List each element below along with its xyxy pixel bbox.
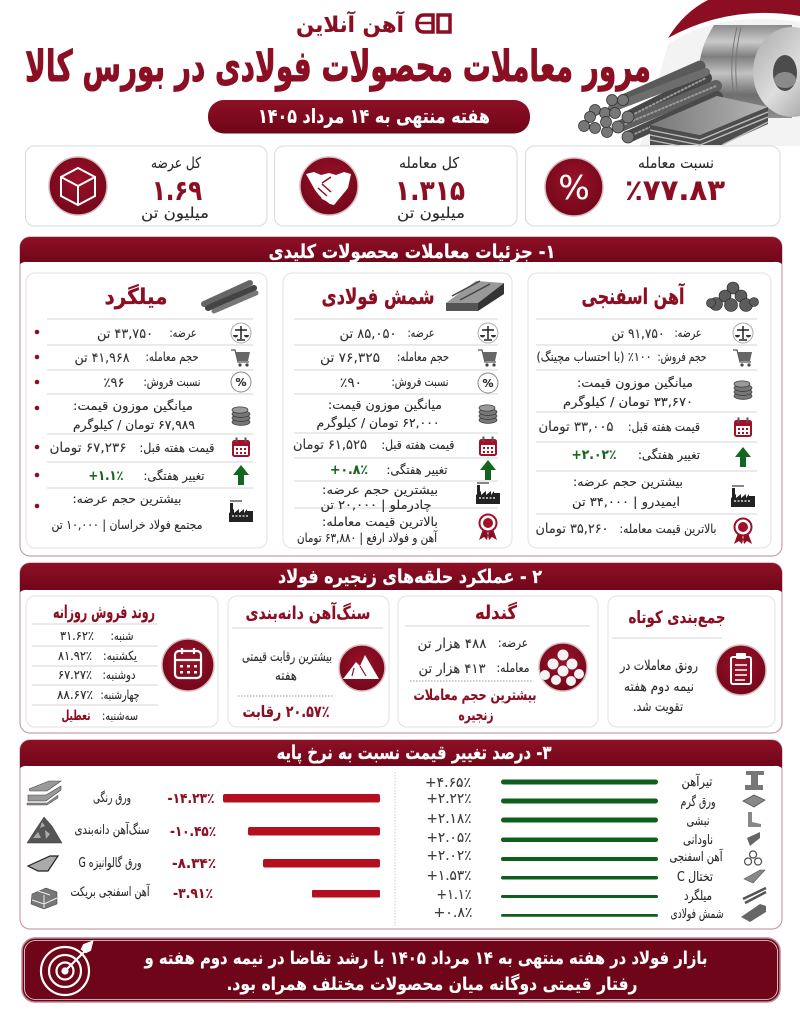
row: Saturday: شنبه: [110, 628, 134, 643]
row: average price: ۳۳,۶۷۰ تومان / کیلوگرم [563, 394, 693, 410]
row: top supply: بیشترین حجم عرضه: [322, 482, 438, 498]
bar: slab C [426, 868, 765, 885]
row icons [731, 323, 755, 544]
row: weekly change: +۲.۰۲٪ [572, 447, 616, 463]
row: top price: آهن و فولاد ارفع | ۶۳,۸۸۰ تومان [297, 530, 437, 546]
panel: daily sales trend [26, 596, 218, 727]
bar: galvanized G: ورق گالوانیزه G [78, 855, 142, 871]
row: sale ratio: ٪۹۰ [340, 375, 362, 391]
panel: steel billet [283, 273, 512, 548]
row: volume [74, 349, 198, 366]
row: supply [612, 325, 702, 342]
row: weekly change: تغییر هفتگی: [638, 447, 700, 463]
row: supply: عرضه: [170, 325, 196, 341]
row: Wednesday: ۸۸.۶۷٪ [57, 687, 93, 702]
chart: negative changes [27, 781, 380, 909]
panel: granulated iron ore: هفته [275, 668, 297, 684]
panel: short summary [608, 596, 775, 727]
row: previous price [538, 419, 700, 435]
bar: slab C: تختال C [677, 870, 713, 885]
icon: cube [61, 168, 95, 205]
bar: rebar: +۱.۱٪ [436, 887, 472, 903]
row: top supply: بیشترین حجم عرضه: [573, 474, 683, 490]
row: sale ratio [104, 374, 200, 391]
row: previous price: قیمت هفته قبل: [628, 419, 700, 434]
row: Monday: ۶۷.۲۷٪ [58, 667, 92, 682]
row: sale ratio [340, 374, 448, 391]
panel: rebar [26, 273, 267, 548]
row: supply: عرضه: [674, 325, 702, 341]
bar: channel [426, 830, 760, 848]
row: supply: ۴۳,۷۵۰ تن [97, 326, 153, 342]
bullet dots [35, 330, 39, 508]
icon: mountain [339, 645, 385, 691]
row: average price [563, 375, 693, 410]
bar: channel: ناودانی [683, 833, 713, 848]
section 2 heading: ۲ - عملکرد حلقه‌های زنجیره فولاد [278, 566, 542, 588]
row: Sunday [58, 648, 137, 663]
bar: sponge iron: آهن اسفنجی [670, 848, 724, 865]
bar: slab C: +۱.۵۳٪ [426, 868, 472, 884]
bar: sponge iron [426, 848, 762, 865]
panel: short summary: نیمه دوم هفته [624, 679, 694, 695]
row: Sunday: ۸۱.۹۲٪ [58, 648, 92, 663]
bar: beam: +۴.۶۵٪ [425, 775, 471, 791]
bar: briquette: -۳.۹۱٪ [173, 886, 213, 902]
row: supply: عرضه: [408, 325, 434, 341]
row: top price [536, 521, 716, 537]
KPI card: total trade: میلیون تن [397, 204, 465, 222]
panel: short summary: رونق معاملات در [619, 658, 698, 674]
row: supply: ۹۱,۷۵۰ تن [612, 326, 664, 342]
row icons [476, 323, 500, 540]
image: rebar bundle [204, 283, 256, 311]
row: weekly change [88, 468, 205, 484]
row: weekly change [572, 447, 700, 463]
row: Wednesday [57, 687, 140, 703]
panel: pellet [398, 596, 598, 727]
row: top price: بالاترین قیمت معامله: [620, 521, 716, 537]
row: trade [418, 660, 530, 677]
row: Saturday [60, 628, 134, 643]
bar: galvanized G: -۸.۳۴٪ [172, 856, 216, 872]
row: volume: حجم معامله: [397, 349, 449, 365]
bar: hot sheet: +۲.۲۲٪ [426, 791, 472, 807]
icon: clipboard [716, 645, 766, 695]
bar: angle: نبشی [686, 814, 710, 829]
bar: colored sheet: ورق رنگی [93, 790, 131, 806]
row: top price [297, 514, 438, 546]
chart: positive changes [425, 771, 766, 922]
bar: briquette: آهن اسفنجی بریکت [70, 883, 151, 900]
date pill: هفته منتهی به ۱۴ مرداد ۱۴۰۵ [258, 104, 490, 128]
row: volume: ۴۱,۹۶۸ تن [74, 350, 130, 366]
conclusion banner [22, 938, 780, 1002]
row: top supply [320, 482, 438, 513]
product name: آهن اسفنجی [582, 282, 685, 310]
row: average price: میانگین موزون قیمت: [328, 397, 442, 413]
section 2: steel chain performance [20, 563, 782, 733]
icon: calendar [162, 639, 214, 691]
row: top supply [572, 474, 683, 510]
bar: billet [434, 904, 766, 922]
section 1: key product details [20, 237, 782, 556]
row: supply: ۴۸۸ هزار تن [418, 636, 486, 652]
row: sale volume: ٪۱۰۰ (با احتساب مچینگ) [536, 349, 652, 364]
row: sale ratio: نسبت فروش: [392, 374, 448, 390]
section 3 heading: ۳- درصد تغییر قیمت نسبت به نرخ پایه [276, 742, 552, 764]
bar: rebar [436, 887, 766, 904]
row: supply [97, 325, 196, 342]
row: top supply: چادرملو | ۲۰,۰۰۰ تن [320, 497, 432, 513]
hero image: steel coil, rebar and sheets [578, 0, 800, 146]
panel: short summary: جمع‌بندی کوتاه [628, 608, 726, 628]
bar: briquette [31, 883, 380, 909]
row: volume: ۷۶,۳۲۵ تن [320, 350, 380, 366]
product name: میلگرد [104, 283, 168, 310]
row: previous price: قیمت هفته قبل: [382, 437, 455, 452]
row: weekly change: +۰.۸٪ [330, 462, 368, 478]
row: top supply [52, 491, 202, 533]
row: previous price: قیمت هفته قبل: [140, 440, 215, 455]
row: Tuesday: سه‌شنبه: [102, 708, 138, 723]
row: average price [316, 397, 442, 431]
panel: pellet: گندله [475, 601, 518, 624]
bar: galvanized G [28, 855, 380, 872]
bar: sponge iron: +۲.۰۲٪ [426, 848, 472, 864]
row: sale ratio: ٪۹۶ [104, 375, 124, 391]
row: top supply: بیشترین حجم عرضه: [72, 491, 182, 507]
row: previous price: ۶۱,۵۲۵ تومان [293, 437, 367, 453]
row: sale volume: حجم فروش: [658, 349, 706, 365]
row: Wednesday: چهارشنبه: [100, 687, 140, 703]
KPI card: total trade: کل معامله [399, 154, 460, 172]
image: sponge iron pellets [706, 282, 758, 312]
product name: شمش فولادی [322, 285, 434, 310]
bar: granulated ore: سنگ‌آهن دانه‌بندی [74, 821, 150, 838]
row: trade: معامله: [496, 660, 530, 675]
row: top price: بالاترین قیمت معامله: [322, 514, 438, 530]
bar: beam: تیرآهن [682, 773, 713, 790]
row icons: % [235, 376, 247, 389]
row icons [229, 323, 253, 522]
row: supply [340, 325, 434, 342]
KPI card: trade ratio: نسبت معامله [638, 154, 714, 172]
conclusion banner: بازار فولاد در هفته منتهی به ۱۴ مرداد ۱۴۰۵ با رشد تقاضا در نیمه دوم هفته و [144, 948, 707, 969]
row: supply [418, 635, 528, 652]
bar: hot sheet [426, 791, 765, 810]
logo [296, 10, 450, 38]
KPI card: trade ratio: % [558, 168, 590, 207]
row icons: % [482, 377, 494, 390]
row: top price: ۳۵,۲۶۰ تومان [536, 521, 608, 537]
panel: granulated iron ore: بیشترین رقابت قیمتی [242, 649, 332, 665]
row: average price [73, 398, 195, 433]
row: average price: ۶۲,۰۰۰ تومان / کیلوگرم [316, 415, 440, 431]
row: previous price: ۳۳,۰۰۵ تومان [538, 419, 614, 435]
logo: آهن آنلاین [296, 10, 404, 38]
row: previous price [293, 437, 455, 453]
bar: billet: شمش فولادی [670, 907, 724, 922]
callout: بیشترین حجم معاملات [414, 686, 536, 704]
image: billets [446, 281, 504, 311]
row: Monday: دوشنبه: [102, 667, 136, 683]
bar: colored sheet: -۱۴.۲۳٪ [168, 791, 214, 807]
panel: daily sales trend: روند فروش روزانه [53, 602, 155, 623]
row: sale volume [536, 349, 706, 365]
callout [414, 686, 536, 724]
panel: short summary: تقویت شد. [633, 699, 683, 715]
KPI card: total supply: ۱.۶۹ [152, 174, 202, 207]
bar: hot sheet: ورق گرم [680, 794, 716, 810]
row: weekly change [330, 462, 448, 478]
panel: granulated iron ore: ۲۰.۵۷٪ رقابت [242, 702, 330, 721]
date pill [208, 100, 530, 134]
bar: angle [426, 811, 761, 829]
KPI card: total supply: میلیون تن [141, 204, 209, 222]
icon: target [41, 942, 92, 995]
icon: handshake [306, 172, 351, 205]
panel: sponge iron [528, 273, 771, 548]
row: Tuesday: تعطیل [62, 708, 90, 724]
panel: granulated iron ore [228, 596, 389, 727]
KPI card: trade ratio: ٪۷۷.۸۳ [625, 173, 725, 207]
KPI card: trade ratio [526, 146, 780, 226]
KPI card: total trade: ۱.۳۱۵ [395, 174, 465, 207]
bar: angle: +۲.۱۸٪ [426, 811, 472, 827]
bar: colored sheet [27, 781, 380, 807]
bar: channel: +۲.۰۵٪ [426, 830, 472, 846]
row: volume: حجم معامله: [146, 349, 198, 365]
callout: زنجیره [458, 706, 494, 724]
bar: rebar: میلگرد [684, 888, 712, 904]
section 1 heading: ۱- جزئیات معاملات محصولات کلیدی [268, 241, 556, 263]
row: volume [320, 349, 449, 366]
row: weekly change: تغییر هفتگی: [386, 462, 448, 478]
row: Tuesday [62, 708, 138, 724]
row: average price: میانگین موزون قیمت: [73, 398, 193, 414]
bar: granulated ore [27, 817, 380, 843]
row: trade: ۴۱۳ هزار تن [418, 661, 486, 677]
row: supply: عرضه: [498, 635, 528, 651]
row: weekly change: تغییر هفتگی: [144, 468, 205, 484]
icon: pellets [539, 643, 587, 691]
KPI card: total supply: کل عرضه [151, 154, 202, 172]
conclusion banner: رفتار قیمتی دوگانه میان محصولات مختلف همراه بود. [226, 973, 638, 995]
bar: beam [425, 771, 764, 791]
row: sale ratio: نسبت فروش: [144, 374, 200, 390]
row: supply: ۸۵,۰۵۰ تن [340, 326, 396, 342]
row: average price: ۶۷,۹۸۹ تومان / کیلوگرم [73, 417, 195, 433]
row: weekly change: +۱.۱٪ [88, 468, 124, 484]
bar: granulated ore: -۱۰.۴۵٪ [170, 824, 216, 840]
row: previous price: ۶۷,۲۳۶ تومان [50, 440, 127, 456]
panel: granulated iron ore: سنگ‌آهن دانه‌بندی [246, 601, 370, 624]
KPI card: total supply [26, 146, 267, 226]
row: top supply: مجتمع فولاد خراسان | ۱۰,۰۰۰ تن [52, 517, 202, 533]
row: average price: میانگین موزون قیمت: [577, 375, 693, 391]
row: Sunday: یکشنبه: [103, 648, 137, 663]
row: Saturday: ۳۱.۶۲٪ [60, 628, 94, 643]
row: top supply: ایمیدرو | ۳۴,۰۰۰ تن [572, 494, 680, 510]
bar: billet: +۰.۸٪ [434, 905, 472, 921]
section 3: price change vs base rate [20, 740, 782, 929]
row: Monday [58, 667, 136, 683]
row: previous price [50, 440, 215, 456]
KPI card: total trade [274, 146, 517, 226]
